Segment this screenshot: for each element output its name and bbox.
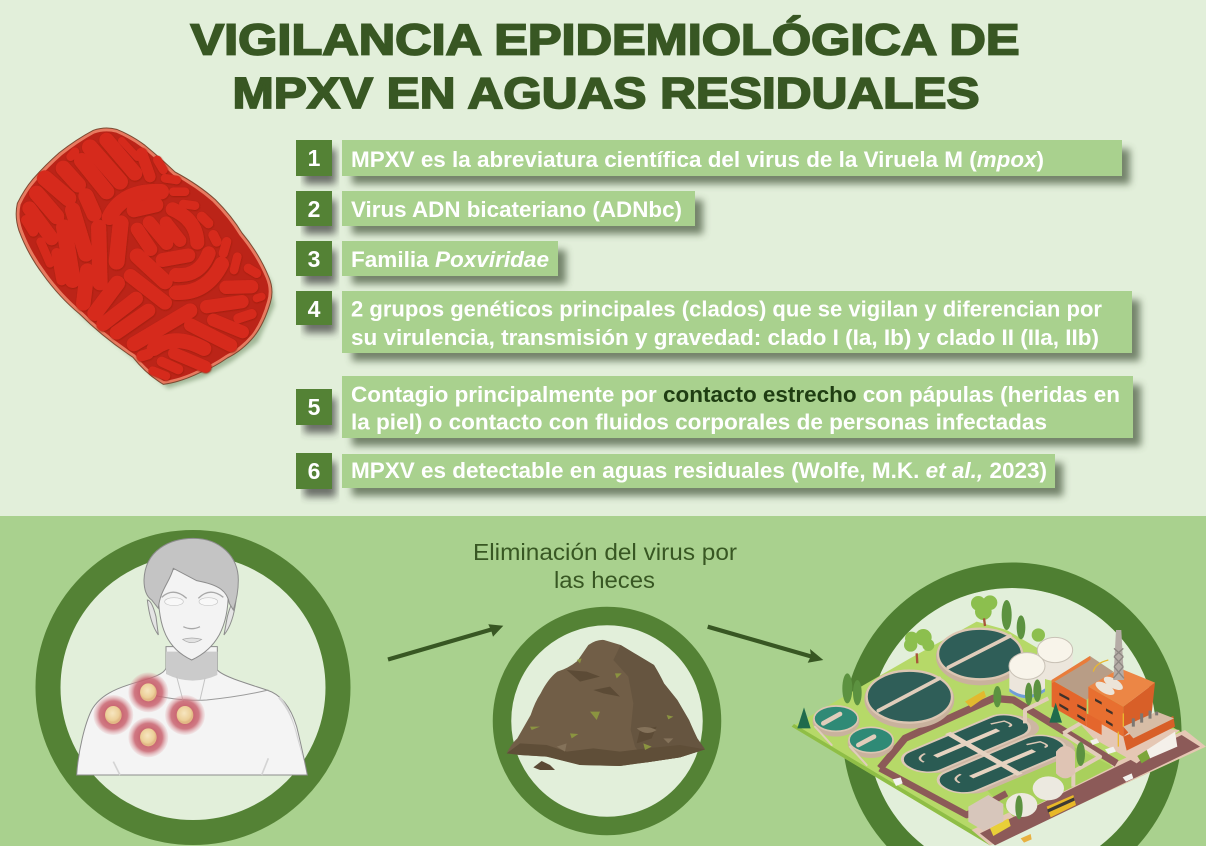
list item 1 — [296, 140, 1130, 184]
access road — [880, 698, 1117, 768]
panel: treatment plant circle — [792, 562, 1206, 846]
trees — [797, 595, 1085, 819]
list item 2 — [296, 191, 703, 234]
arrow: person to feces — [388, 624, 503, 660]
list item 5: la piel) o contacto con fluidos corporales de personas infectadas — [351, 410, 1047, 434]
oxidation ditches — [891, 707, 1084, 800]
list item 4: 2 grupos genéticos principales (clados) que se vigilan y diferencian por — [351, 296, 1102, 322]
list item 6: 6 — [308, 458, 320, 484]
list item 4: 4 — [308, 296, 321, 322]
list item 2: 2 — [308, 196, 320, 222]
storage silos — [1009, 637, 1073, 698]
list item 1: 1 — [308, 145, 321, 171]
list item 5: 5 — [308, 394, 321, 420]
arrow: feces to treatment plant — [708, 627, 823, 663]
label: virus elimination: las heces — [554, 567, 655, 593]
label: virus elimination: Eliminación del virus por — [473, 539, 737, 565]
list item 6 — [296, 453, 1063, 497]
panel: infected person circle — [48, 538, 338, 832]
panel: top background — [0, 0, 1206, 516]
list item 3: Familia Poxviridae — [351, 247, 549, 272]
icon: MPXV virus particle — [16, 128, 275, 389]
list item 6: MPXV es detectable en aguas residuales (Wolfe, M.K. et al., 2023) — [351, 458, 1047, 483]
panel: bottom background — [0, 516, 1206, 846]
title: VIGILANCIA EPIDEMIOLÓGICA DE — [190, 14, 1020, 64]
pipes — [1025, 698, 1100, 787]
main building — [1052, 656, 1175, 751]
lesions — [93, 672, 205, 757]
label: virus elimination — [473, 539, 737, 593]
list item 2: Virus ADN bicateriano (ADNbc) — [351, 197, 682, 222]
vehicles — [893, 691, 1177, 843]
list item 1: MPXV es la abreviatura científica del virus de la Viruela M (mpox) — [351, 147, 1044, 172]
ground — [792, 622, 1206, 845]
panel: feces circle — [502, 616, 712, 826]
title: MPXV EN AGUAS RESIDUALES — [232, 69, 980, 118]
icon: wastewater treatment plant — [792, 595, 1206, 845]
list item 4 — [296, 291, 1140, 361]
list item 5: Contagio principalmente por contacto estrecho con pápulas (heridas en — [351, 382, 1120, 407]
tank bridges — [815, 636, 1010, 765]
list item 4: su virulencia, transmisión y gravedad: clado I (Ia, Ib) y clado II (IIa, IIb) — [351, 325, 1099, 350]
digester tanks — [1006, 746, 1075, 817]
communications tower — [1113, 630, 1124, 680]
icon: mound of feces — [507, 640, 705, 770]
clarifier tanks — [813, 628, 1024, 758]
icon: person with skin lesions — [77, 538, 307, 775]
list item 5 — [296, 376, 1141, 446]
list item 3 — [296, 241, 566, 284]
list item 3: 3 — [308, 246, 320, 272]
title — [190, 14, 1020, 118]
